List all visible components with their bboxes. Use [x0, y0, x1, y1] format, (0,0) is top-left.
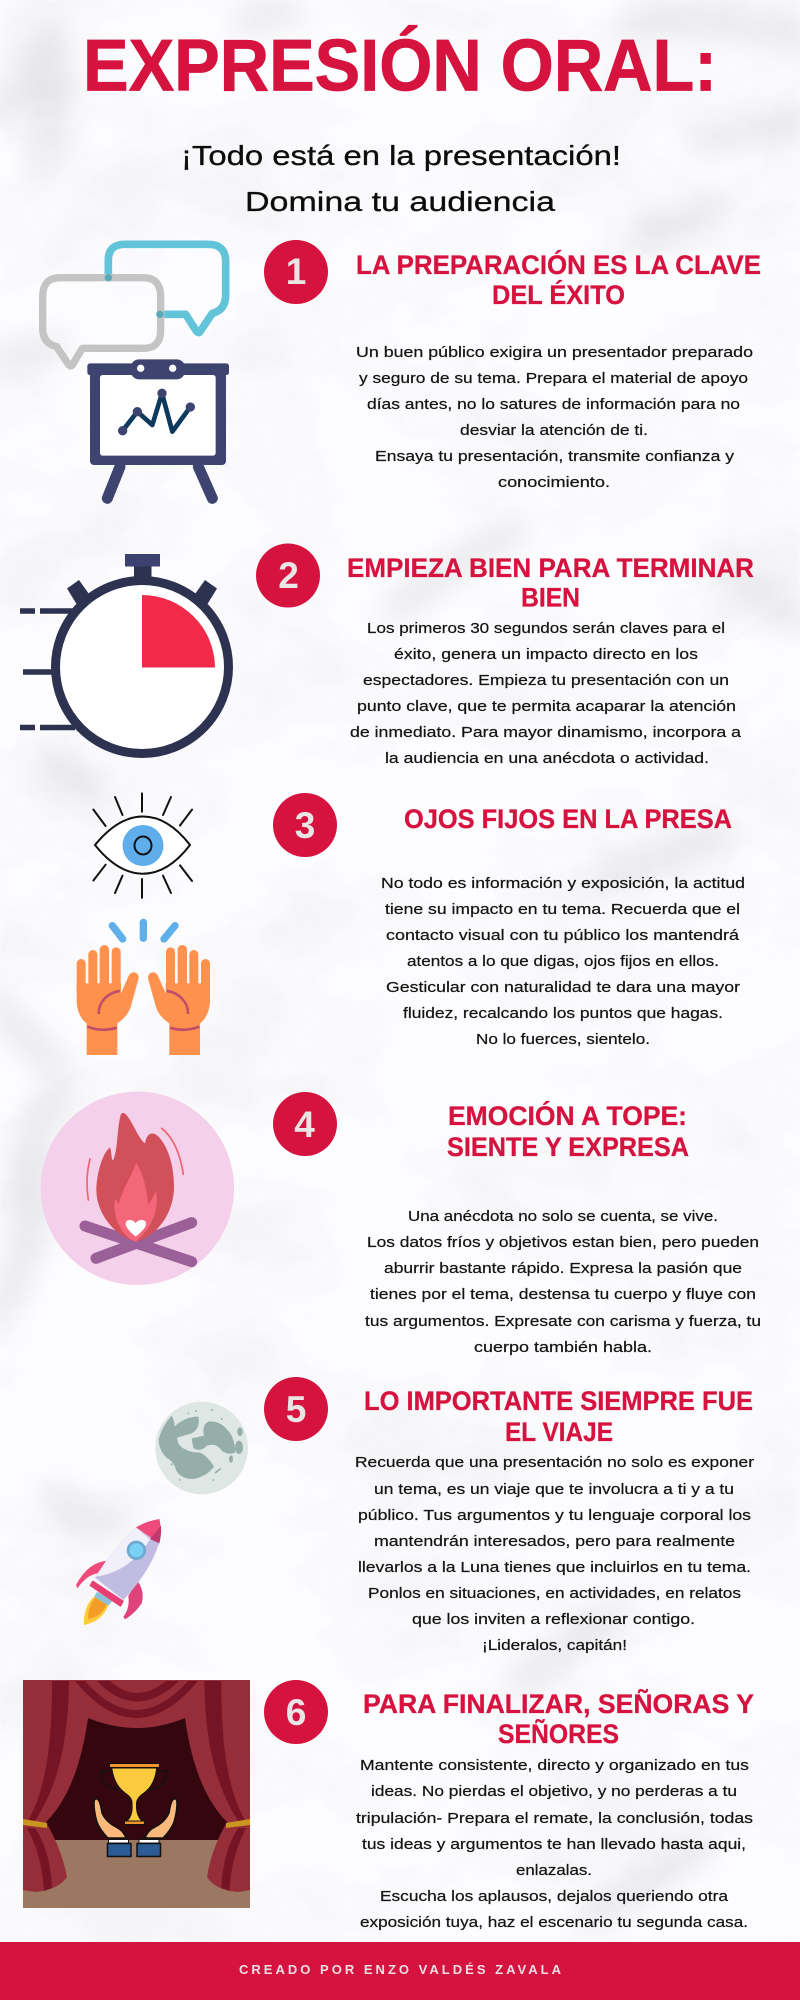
- text block 2: punto clave, que te permita acaparar la atención: [357, 698, 736, 715]
- heading 2: BIEN: [521, 582, 580, 612]
- heading 1: [356, 249, 761, 310]
- icon: stopwatch: [20, 554, 228, 754]
- icon: moon: [155, 1402, 248, 1494]
- text block 2: Los primeros 30 segundos serán claves para el: [367, 620, 725, 637]
- icon: campfire: [41, 1092, 234, 1285]
- text block 3: tiene su impacto en tu tema. Recuerda que el: [385, 901, 740, 918]
- panel: step 3 eye contact: [77, 793, 745, 1055]
- text block 3: Gesticular con naturalidad te dara una mayor: [386, 979, 740, 996]
- text block 5: un tema, es un viaje que te involucra a ti y a tu: [374, 1481, 734, 1498]
- heading 5: EL VIAJE: [505, 1417, 613, 1447]
- footer bar: CREADO POR ENZO VALDÉS ZAVALA: [239, 1962, 562, 1977]
- icon: theatre stage with trophy: [23, 1680, 250, 1908]
- number badge 1: 1: [286, 251, 306, 292]
- text block 2: espectadores. Empieza tu presentación con un: [363, 672, 729, 689]
- heading 6: PARA FINALIZAR, SEÑORAS Y: [363, 1688, 754, 1719]
- subtitle: [181, 140, 621, 217]
- title: EXPRESIÓN ORAL:: [83, 26, 717, 106]
- number badge 6: [264, 1680, 328, 1744]
- text block 2: de inmediato. Para mayor dinamismo, incorpora a: [350, 724, 742, 741]
- text block 3: [381, 875, 745, 1048]
- text block 3: No lo fuerces, sientelo.: [476, 1031, 650, 1048]
- heading 2: [347, 553, 754, 612]
- text block 4: Una anécdota no solo se cuenta, se vive.: [408, 1208, 718, 1225]
- text block 3: No todo es información y exposición, la actitud: [381, 875, 745, 892]
- text block 6: [356, 1757, 753, 1931]
- icon: eye: [93, 793, 192, 898]
- text block 5: que los inviten a reflexionar contigo.: [412, 1611, 695, 1628]
- heading 5: [364, 1386, 753, 1447]
- heading 4: SIENTE Y EXPRESA: [447, 1132, 689, 1162]
- text block 4: cuerpo también habla.: [474, 1339, 652, 1356]
- text block 6: ideas. No pierdas el objetivo, y no perderas a tu: [371, 1783, 737, 1800]
- text block 4: [365, 1208, 761, 1356]
- text block 2: éxito, genera un impacto directo en los: [394, 646, 698, 663]
- text block 5: Recuerda que una presentación no solo es exponer: [355, 1454, 754, 1471]
- text block 5: [355, 1454, 754, 1654]
- heading 4: EMOCIÓN A TOPE:: [448, 1100, 687, 1131]
- text block 6: tus ideas y argumentos te han llevado hasta aqui,: [362, 1836, 746, 1853]
- text block 4: tienes por el tema, destensa tu cuerpo y fluye con: [370, 1286, 756, 1303]
- number badge 3: [273, 793, 337, 857]
- subtitle: ¡Todo está en la presentación!: [181, 140, 621, 171]
- text block 4: Los datos fríos y objetivos estan bien, pero pueden: [367, 1234, 759, 1251]
- text block 3: atentos a lo que digas, ojos fijos en ellos.: [407, 953, 719, 970]
- text block 2: [350, 620, 742, 767]
- text block 1: Ensaya tu presentación, transmite confianza y: [375, 448, 735, 465]
- text block 1: y seguro de su tema. Prepara el material de apoyo: [359, 370, 748, 387]
- number badge 2: 2: [278, 555, 299, 596]
- panel: step 6 closing: [23, 1680, 754, 1931]
- text block 5: público. Tus argumentos y tu lenguaje corporal los: [358, 1507, 751, 1524]
- panel: step 1 preparation: [43, 240, 761, 498]
- text block 3: fluidez, recalcando los puntos que hagas.: [403, 1005, 723, 1022]
- text block 5: Ponlos en situaciones, en actividades, en relatos: [368, 1585, 741, 1602]
- panel: step 2 start well: [20, 544, 754, 767]
- text block 1: conocimiento.: [498, 474, 610, 491]
- heading 6: [363, 1688, 754, 1749]
- text block 4: aburrir bastante rápido. Expresa la pasión que: [384, 1260, 742, 1277]
- number badge 2: [256, 544, 320, 608]
- text block 3: contacto visual con tu público los mantendrá: [386, 927, 740, 944]
- text block 6: Mantente consistente, directo y organizado en tus: [360, 1757, 749, 1774]
- number badge 6: 6: [286, 1692, 306, 1733]
- text block 5: llevarlos a la Luna tienes que incluirlos en tu tema.: [358, 1559, 751, 1576]
- text block 2: la audiencia en una anécdota o actividad.: [385, 750, 709, 767]
- footer bar: [0, 1942, 800, 2000]
- text block 6: Escucha los aplausos, dejalos queriendo otra: [380, 1888, 729, 1905]
- number badge 4: 4: [294, 1104, 315, 1145]
- text block 1: desviar la atención de ti.: [460, 422, 648, 439]
- text block 1: días antes, no lo satures de información para no: [367, 396, 740, 413]
- icon: raised hands: [77, 922, 210, 1055]
- heading 6: SEÑORES: [498, 1718, 619, 1749]
- number badge 3: 3: [295, 805, 315, 846]
- panel: step 4 emotion: [41, 1092, 761, 1356]
- subtitle: Domina tu audiencia: [245, 186, 556, 217]
- panel: step 5 journey: [76, 1377, 754, 1654]
- heading 5: LO IMPORTANTE SIEMPRE FUE: [364, 1386, 753, 1416]
- text block 6: enlazalas.: [516, 1862, 592, 1879]
- text block 1: [356, 344, 753, 491]
- text block 6: exposición tuya, haz el escenario tu segunda casa.: [360, 1914, 748, 1931]
- number badge 5: 5: [286, 1389, 306, 1430]
- heading 1: DEL ÉXITO: [492, 279, 625, 310]
- heading 4: [447, 1100, 689, 1162]
- text block 5: mantendrán interesados, pero para realmente: [374, 1533, 735, 1550]
- number badge 4: [273, 1092, 337, 1156]
- heading 1: LA PREPARACIÓN ES LA CLAVE: [356, 249, 761, 280]
- number badge 5: [264, 1377, 328, 1441]
- text block 5: ¡Lideralos, capitán!: [482, 1637, 627, 1654]
- number badge 1: [264, 240, 328, 304]
- icon: speech bubbles and presentation board: [43, 244, 229, 498]
- heading 3: OJOS FIJOS EN LA PRESA: [404, 804, 732, 834]
- text block 1: Un buen público exigira un presentador preparado: [356, 344, 753, 361]
- text block 6: tripulación- Prepara el remate, la conclusión, todas: [356, 1810, 753, 1827]
- icon: rocket: [76, 1519, 161, 1625]
- heading 2: EMPIEZA BIEN PARA TERMINAR: [347, 553, 754, 583]
- text block 4: tus argumentos. Expresate con carisma y fuerza, tu: [365, 1313, 761, 1330]
